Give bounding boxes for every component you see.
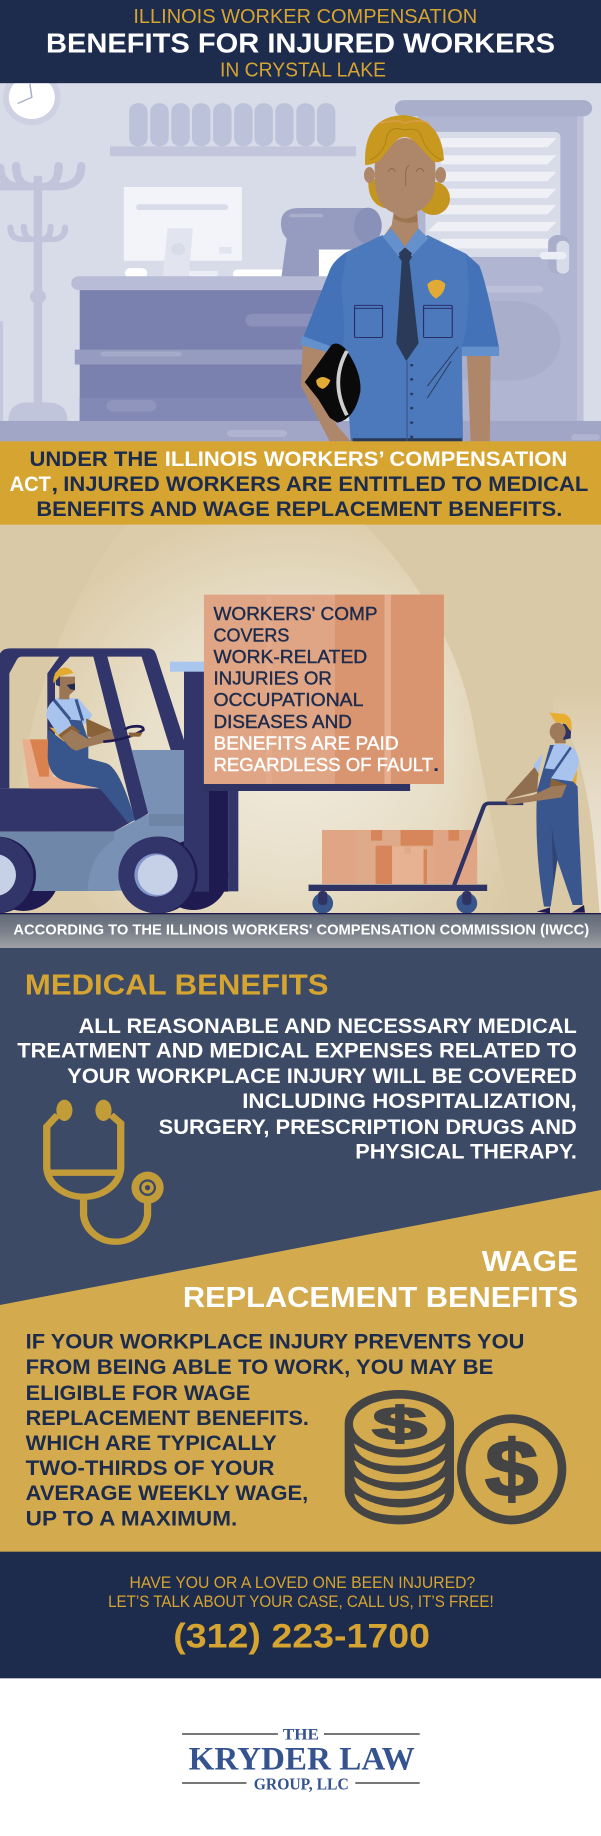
title block: BENEFITS FOR INJURED WORKERS: [46, 29, 555, 59]
illustration: office background: [0, 70, 601, 442]
illustration: worker pushing cart: [505, 713, 585, 913]
icon: office chair: [281, 208, 382, 281]
cargo box text: INJURIES OR: [213, 669, 332, 689]
panel: warehouse scene: [0, 525, 601, 915]
panel: call to action: HAVE YOU OR A LOVED ONE BEEN INJURED?: [130, 1573, 475, 1592]
title block: ILLINOIS WORKER COMPENSATION: [133, 4, 477, 28]
illustration: forklift with driver: [0, 648, 238, 913]
panel: call to action: (312) 223-1700: [173, 1617, 430, 1655]
forklift cab frame: [0, 648, 184, 822]
logo: The Kryder Law Group: KRYDER LAW: [189, 1741, 415, 1777]
text: medical benefits body: [17, 1014, 577, 1163]
wage panel background: [0, 1190, 601, 1553]
heading: medical benefits: MEDICAL BENEFITS: [25, 969, 328, 1001]
title block: [0, 0, 601, 83]
text: wage benefits body: AVERAGE WEEKLY WAGE,: [26, 1481, 308, 1505]
callout: intro banner: ACT: [10, 471, 51, 496]
logo: The Kryder Law Group: GROUP, LLC: [254, 1774, 349, 1793]
cart boxes: [322, 830, 477, 884]
hand cart: [309, 803, 523, 914]
cargo box text: WORKERS' COMP: [213, 604, 378, 625]
forklift body: [0, 662, 238, 911]
icon: computer monitor: [124, 187, 302, 278]
driver: [22, 667, 143, 823]
icon: stack of coins and single coin: $: [373, 1397, 427, 1449]
logo: The Kryder Law Group: [182, 1725, 420, 1793]
cargo box text: BENEFITS ARE PAID: [213, 734, 399, 754]
text: wage benefits body: UP TO A MAXIMUM.: [26, 1507, 237, 1530]
text: wage benefits body: FROM BEING ABLE TO WORK, YOU MAY BE: [26, 1355, 493, 1379]
panel: call to action: LET’S TALK ABOUT YOUR CASE, CALL US, IT’S FREE!: [108, 1592, 494, 1611]
warehouse background: [0, 525, 601, 915]
callout: intro banner: [0, 441, 601, 525]
heading: wage replacement benefits: REPLACEMENT BENEFITS: [183, 1282, 578, 1313]
text: medical benefits body: PHYSICAL THERAPY.: [355, 1140, 577, 1163]
cargo box text: OCCUPATIONAL: [213, 690, 363, 711]
cargo box text: REGARDLESS OF FAULT: [213, 755, 433, 776]
logo: The Kryder Law Group: THE: [283, 1725, 319, 1743]
text: medical benefits body: INCLUDING HOSPITALIZATION,: [242, 1089, 577, 1113]
title block: IN CRYSTAL LAKE: [220, 58, 386, 81]
icon: stack of coins and single coin: [345, 1390, 562, 1524]
heading: wage replacement benefits: WAGE: [482, 1246, 578, 1277]
text: wage benefits body: [26, 1330, 524, 1530]
forklift wheels: [0, 837, 198, 913]
text: wage benefits body: TWO-THIRDS OF YOUR: [26, 1456, 274, 1480]
text: wage benefits body: IF YOUR WORKPLACE INJURY PREVENTS YOU: [26, 1330, 524, 1353]
cargo box text: .: [433, 755, 439, 776]
cargo box text: COVERS: [213, 626, 289, 646]
reception desk: [71, 276, 333, 422]
panel: call to action: [0, 1552, 601, 1678]
text: wage benefits body: REPLACEMENT BENEFITS.: [26, 1406, 309, 1430]
callout: intro banner: ,: [51, 471, 58, 496]
cargo on forks: [204, 595, 444, 791]
icon: coat rack: [0, 166, 81, 421]
cargo box text: DISEASES AND: [213, 712, 352, 733]
illustration: officer body: [300, 235, 499, 442]
callout: intro banner: ILLINOIS WORKERS’ COMPENSATION: [165, 446, 567, 471]
fork and cargo box: [204, 595, 444, 791]
callout: intro banner: UNDER THE: [30, 446, 158, 471]
panel: medical and wage benefits: [0, 948, 601, 1553]
source caption bar: [0, 913, 601, 948]
medical panel background: [0, 948, 601, 1315]
icon: stack of coins and single coin: $: [485, 1424, 538, 1513]
text: wage benefits body: WHICH ARE TYPICALLY: [26, 1431, 277, 1455]
cargo box text: WORK-RELATED: [213, 647, 367, 668]
heading: wage replacement benefits: [183, 1246, 578, 1313]
icon: stethoscope: [47, 1100, 164, 1242]
icon: officer hat: [305, 343, 360, 423]
text: wage benefits body: ELIGIBLE FOR WAGE: [26, 1381, 250, 1405]
illustration: officer head: [364, 115, 450, 259]
cargo box text: [213, 604, 439, 776]
panel: header and office scene: [0, 0, 601, 442]
